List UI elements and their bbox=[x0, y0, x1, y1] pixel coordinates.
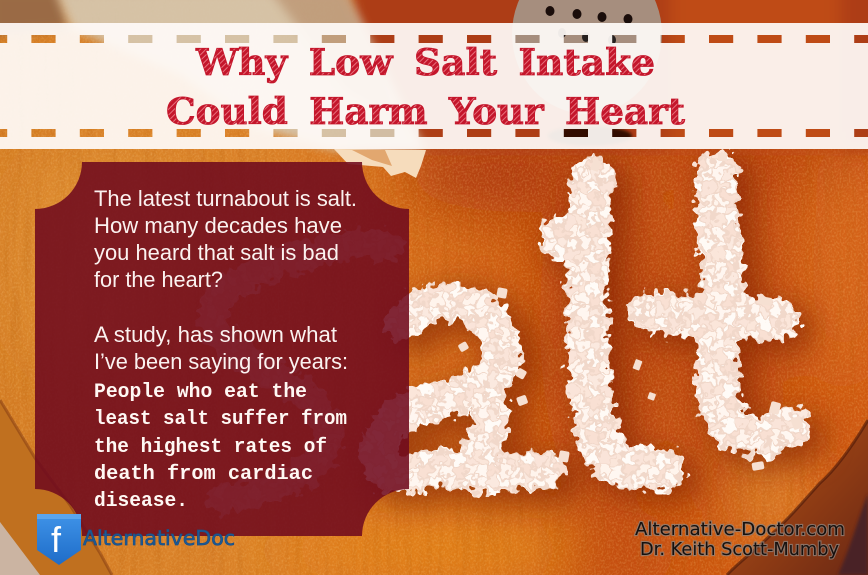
intro paragraph bbox=[94, 186, 357, 292]
typewriter emphasis text: People who eat the bbox=[94, 381, 307, 404]
illustration: salt shaker lid bbox=[512, 0, 662, 146]
title: Could Harm Your Heart bbox=[166, 91, 685, 133]
letter shadows bbox=[391, 181, 802, 483]
board rim lower right bbox=[727, 420, 868, 575]
typewriter emphasis text: the highest rates of bbox=[94, 436, 327, 459]
illustration: the word salt written in coarse salt bbox=[214, 153, 804, 500]
intro paragraph: The latest turnabout is salt. bbox=[94, 186, 357, 211]
website and author credit: Alternative-Doctor.com bbox=[635, 519, 845, 540]
icon: Facebook shield: f bbox=[51, 519, 62, 560]
loose crystals bbox=[458, 153, 804, 471]
intro paragraph: How many decades have bbox=[94, 213, 342, 238]
typewriter emphasis text: death from cardiac bbox=[94, 463, 313, 486]
Facebook handle: AlternativeDoc bbox=[83, 526, 235, 550]
typewriter emphasis text bbox=[94, 381, 347, 513]
intro paragraph: you heard that salt is bad bbox=[94, 240, 339, 265]
panel: text card with scalloped corners bbox=[35, 162, 409, 536]
salt letters bbox=[214, 172, 790, 500]
poured salt at bottle mouth bbox=[334, 149, 426, 178]
title: Why Low Salt Intake bbox=[195, 42, 655, 84]
typewriter emphasis text: least salt suffer from bbox=[94, 408, 347, 431]
top rust area bbox=[350, 0, 868, 150]
study paragraph: I’ve been saying for years: bbox=[94, 349, 348, 374]
website and author credit bbox=[635, 519, 845, 560]
shaker holes bbox=[546, 6, 632, 45]
study paragraph bbox=[94, 322, 348, 374]
typewriter emphasis text: disease. bbox=[94, 490, 188, 513]
top-left edge shading bbox=[0, 0, 70, 34]
title bbox=[166, 42, 685, 133]
icon: Facebook shield bbox=[37, 514, 81, 565]
board rim lower left bbox=[0, 400, 112, 575]
study paragraph: A study, has shown what bbox=[94, 322, 337, 347]
intro paragraph: for the heart? bbox=[94, 267, 223, 292]
title banner with dashed stitching bbox=[0, 23, 868, 149]
illustration: glass salt bottle bbox=[55, 0, 426, 178]
website and author credit: Dr. Keith Scott-Mumby bbox=[640, 539, 839, 560]
